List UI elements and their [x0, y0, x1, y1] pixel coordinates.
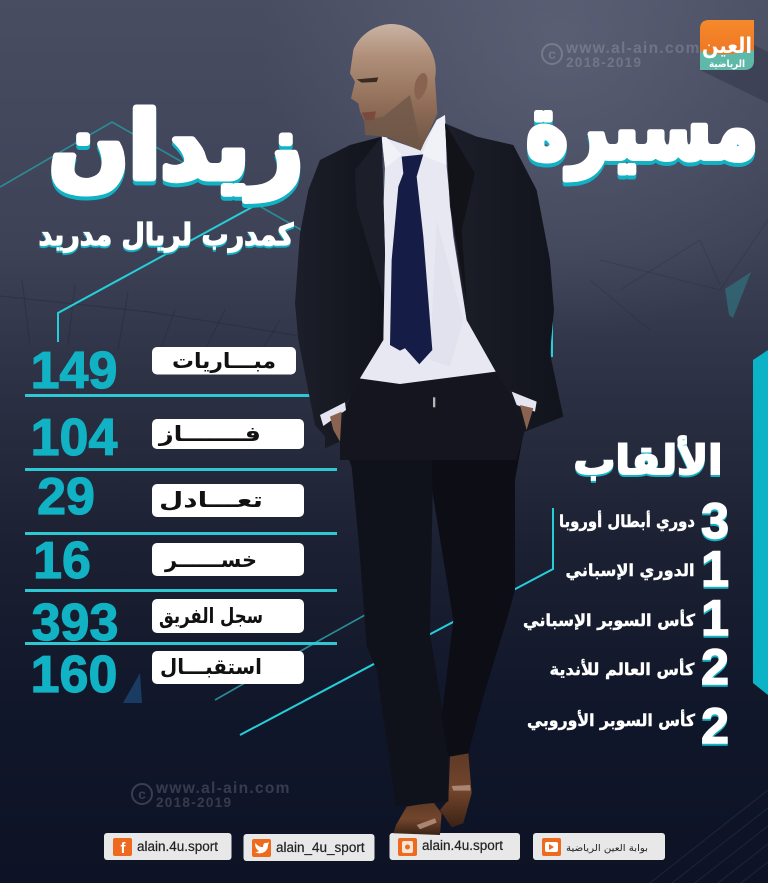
watermark top	[542, 40, 701, 70]
logo: العين	[702, 34, 752, 59]
stat: draws: 29	[37, 468, 95, 526]
title row: club world cup: 2	[701, 639, 729, 695]
bright connector line upper	[58, 205, 256, 342]
figure: upper body	[295, 24, 563, 460]
figure: lower body	[340, 377, 524, 835]
icon: facebook: f	[120, 840, 126, 857]
social: twitter	[244, 834, 374, 861]
social: instagram: alain.4u.sport	[422, 838, 503, 853]
stat: scored	[32, 594, 304, 652]
icon: instagram	[398, 838, 417, 856]
stat: conceded: 160	[31, 646, 117, 704]
title row: spanish super cup: كأس السوبر الإسباني	[523, 610, 695, 631]
title row: spanish super cup	[523, 590, 729, 646]
title row: club world cup	[550, 639, 729, 695]
social: twitter: alain_4u_sport	[276, 840, 365, 855]
icon: youtube	[542, 838, 561, 856]
social: youtube	[533, 833, 665, 860]
watermark bottom	[132, 780, 291, 810]
title row: champions league	[559, 493, 729, 549]
title row: champions league: 3	[701, 493, 729, 549]
right accent bar	[753, 350, 768, 695]
stat: matches: 149	[31, 342, 117, 400]
title row: european super cup: كأس السوبر الأوروبي	[527, 710, 695, 731]
stat: draws	[37, 468, 304, 526]
stat: wins	[31, 409, 304, 467]
social: facebook: alain.4u.sport	[137, 839, 218, 854]
figure: coach portrait	[295, 24, 563, 835]
stat: losses	[33, 532, 304, 590]
watermark top: www.al-ain.com	[565, 40, 701, 57]
title row: european super cup: 2	[701, 698, 729, 754]
stat: conceded	[31, 646, 304, 704]
subtitle: كمدرب لريال مدريد	[38, 218, 294, 253]
stat: matches: مبـــاريات	[172, 349, 276, 373]
titles heading: الألقاب	[574, 435, 722, 484]
watermark bottom: 2018-2019	[156, 795, 232, 810]
stat: scored: سجل الفريق	[159, 604, 263, 628]
decorative dim line	[0, 122, 365, 700]
icon: twitter	[252, 839, 271, 857]
stat: conceded: استقبـــال	[160, 655, 262, 679]
logo	[700, 20, 754, 70]
accent vertical segment	[551, 318, 553, 357]
watermark top: c	[548, 46, 556, 62]
stat: draws: تعـــادل	[159, 488, 263, 512]
stat: wins: 104	[31, 409, 117, 467]
title row: champions league: دوري أبطال أوروبا	[559, 511, 695, 532]
title row: la liga: 1	[701, 541, 729, 597]
social: youtube: بوابة العين الرياضية	[566, 843, 648, 854]
stat: wins: فـــــــاز	[158, 422, 261, 446]
social: facebook	[104, 833, 232, 860]
stat: losses: 16	[33, 532, 91, 590]
stat dividers	[25, 394, 337, 645]
stat: matches	[31, 342, 296, 400]
watermark bottom: c	[138, 786, 146, 802]
stat: scored: 393	[32, 594, 118, 652]
social: instagram	[390, 833, 520, 860]
title row: spanish super cup: 1	[701, 590, 729, 646]
watermark bottom: www.al-ain.com	[155, 780, 291, 797]
watermark top: 2018-2019	[566, 55, 642, 70]
title row: la liga: الدوري الإسباني	[566, 561, 694, 581]
stat: losses: خســــــر	[164, 548, 257, 572]
title: zidane: زيدان	[49, 93, 303, 200]
bright connector line lower	[240, 508, 553, 735]
logo: الرياضية	[709, 59, 745, 70]
title row: club world cup: كأس العالم للأندية	[550, 659, 695, 679]
title row: la liga	[566, 541, 729, 597]
title row: european super cup	[527, 698, 729, 754]
